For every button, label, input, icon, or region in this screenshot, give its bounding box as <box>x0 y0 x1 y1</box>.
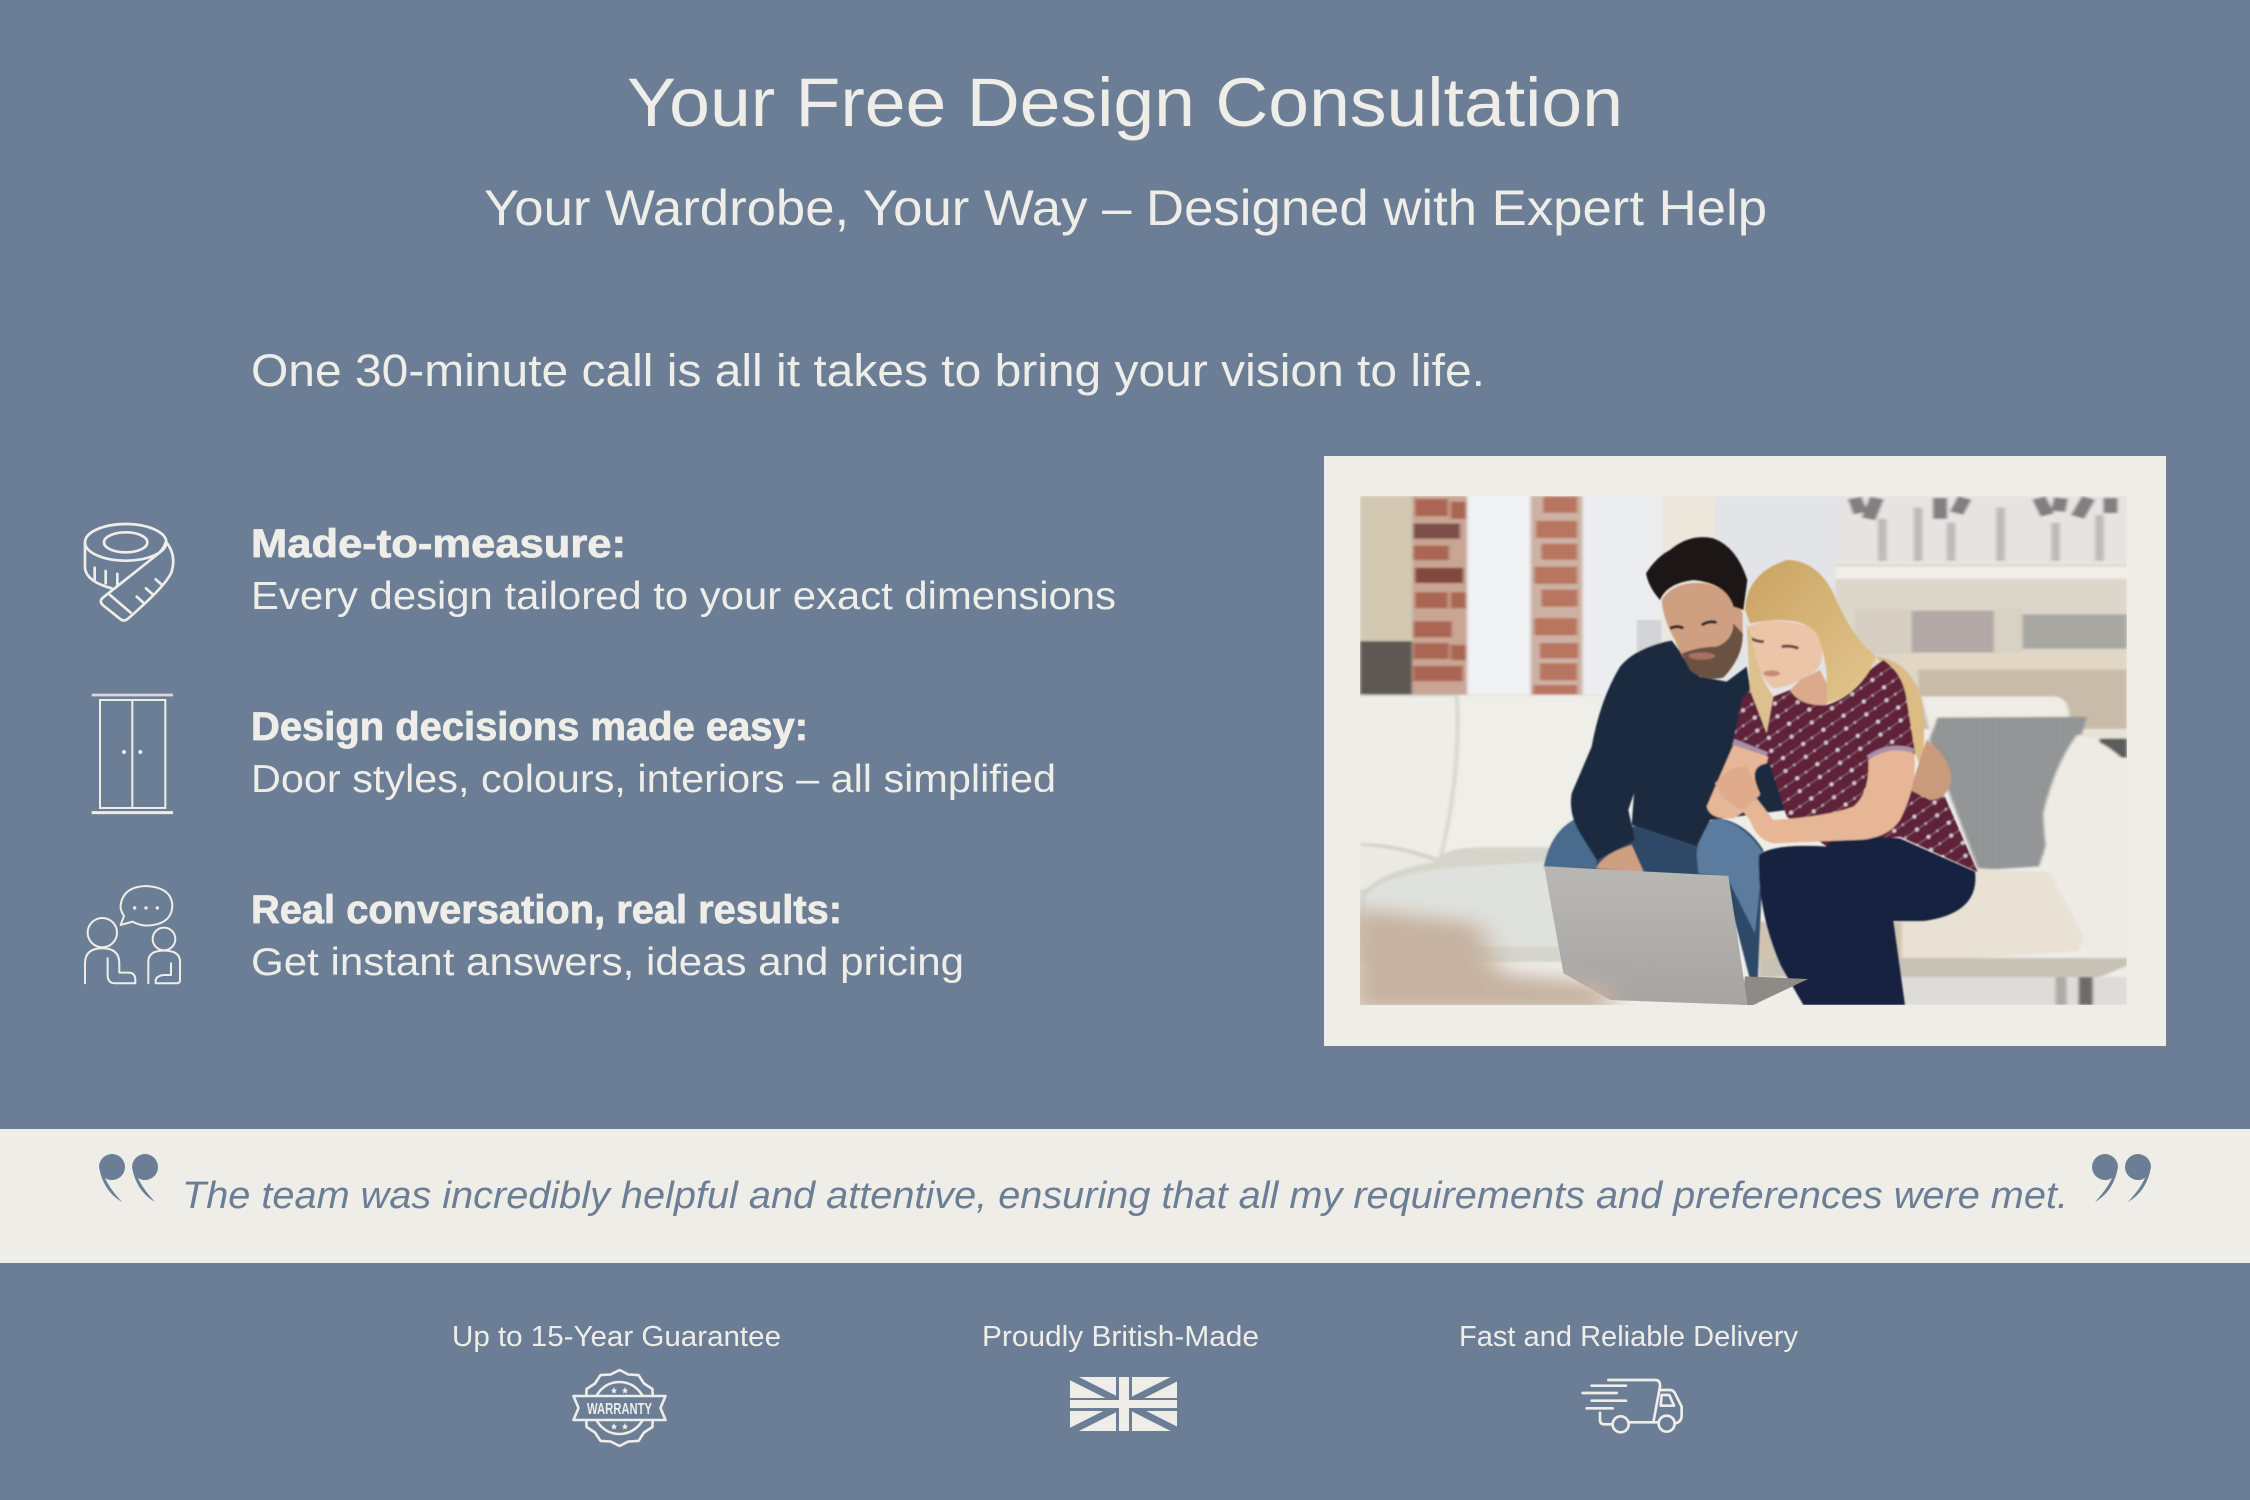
photo frame <box>1324 456 2166 1046</box>
icon: conversation <box>85 886 180 983</box>
icon: wardrobe <box>92 695 173 813</box>
icon: measuring tape <box>85 524 173 620</box>
delivery label: Fast and Reliable Delivery <box>1459 1321 1799 1353</box>
icon: delivery truck <box>1583 1380 1682 1432</box>
photo: couple on sofa with laptop <box>1352 496 2127 1011</box>
subtitle: Your Wardrobe, Your Way – Designed with Expert Help <box>484 180 1767 236</box>
British-made label: Proudly British-Made <box>982 1321 1259 1353</box>
back hair strand <box>1877 657 1924 773</box>
icon: warranty badge <box>574 1370 666 1446</box>
woman hair front <box>1745 560 1877 703</box>
man jeans <box>1544 818 1763 1005</box>
item 1 text <box>251 522 1116 618</box>
blurred foreground <box>1352 908 1610 1011</box>
item 3 text: Get instant answers, ideas and pricing <box>251 941 964 984</box>
testimonial quote: The team was incredibly helpful and attentive, ensuring that all my requirements and preferences were met. <box>182 1175 2068 1217</box>
icon: warranty badge: WARRANTY <box>587 1401 652 1418</box>
testimonial band <box>0 1129 2250 1263</box>
grey chair behind <box>1637 620 1662 653</box>
item 2 text: Door styles, colours, interiors – all simplified <box>251 758 1056 801</box>
icon: union flag <box>1070 1377 1177 1431</box>
woman neck <box>1790 670 1830 705</box>
laptop <box>1742 976 1808 1005</box>
item 2 text <box>251 705 1056 801</box>
icon: closing quote mark <box>2092 1154 2151 1202</box>
intro line: One 30-minute call is all it takes to bring your vision to life. <box>251 345 1485 396</box>
guarantee label: Up to 15-Year Guarantee <box>452 1321 781 1353</box>
woman shirt <box>1733 660 1978 872</box>
icon: opening quote mark <box>99 1154 158 1202</box>
item 3 text: Real conversation, real results: <box>251 888 842 932</box>
item 3 text <box>251 888 964 984</box>
woman pants <box>1759 837 1975 1005</box>
woman arms and hand <box>1742 750 1915 843</box>
title: Your Free Design Consultation <box>627 64 1623 141</box>
item 2 text: Design decisions made easy: <box>251 705 808 749</box>
man head <box>1662 583 1743 678</box>
man sweater <box>1571 641 1787 860</box>
woman face <box>1748 621 1823 688</box>
man hand on shoulder <box>1910 740 1952 800</box>
item 1 text: Made-to-measure: <box>251 522 626 566</box>
item 1 text: Every design tailored to your exact dimensions <box>251 575 1116 618</box>
